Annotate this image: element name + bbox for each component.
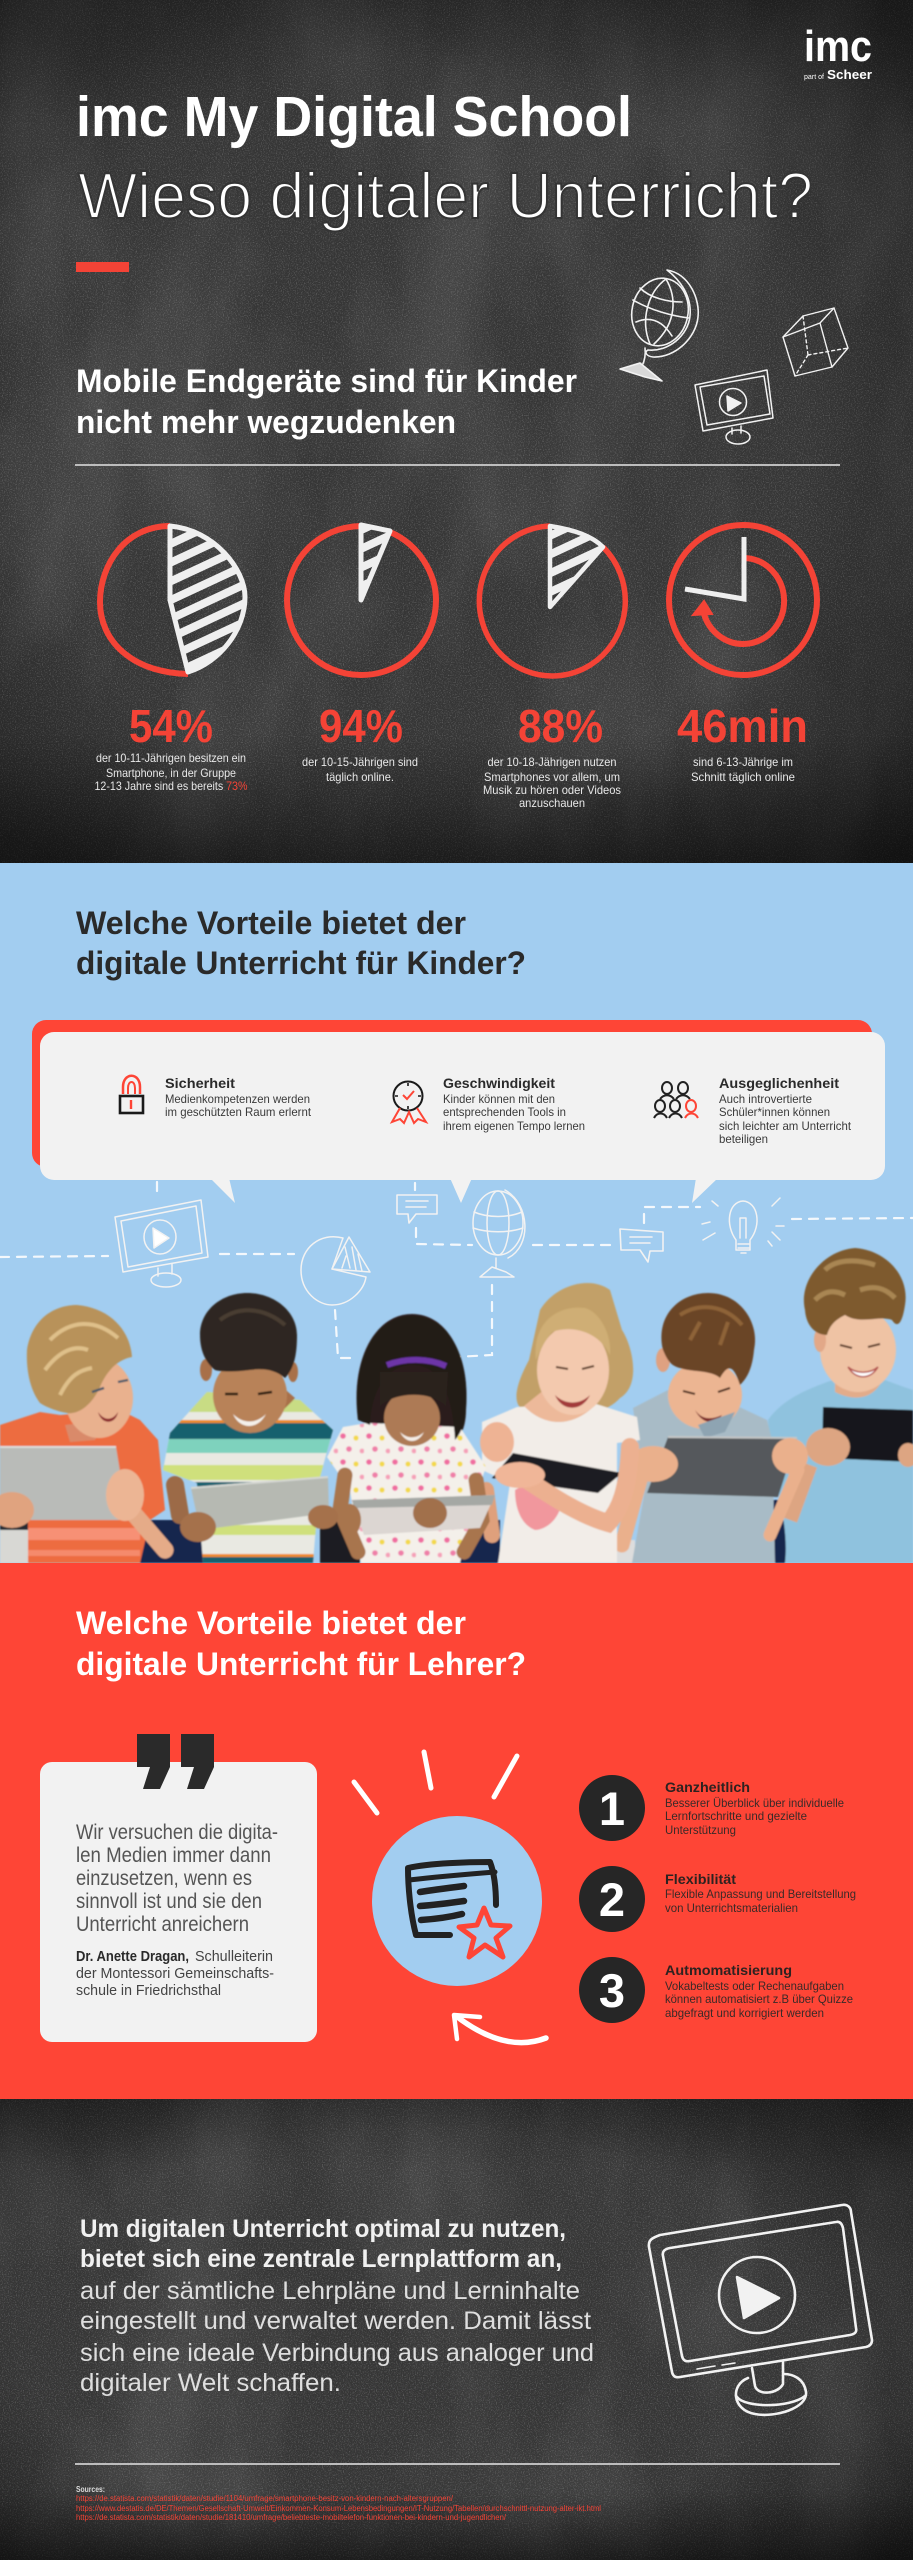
stat descriptions: sind 6-13-Jährige im: [693, 755, 793, 769]
stat descriptions: täglich online.: [326, 770, 394, 784]
list item 1: Ganzheitlich: Lernfortschritte und gezielte: [665, 1809, 807, 1823]
child 2: boy in striped shirt: [160, 1293, 340, 1565]
list item 3: Automatisierung: können automatisiert z.B über Quizze: [665, 1992, 853, 2006]
benefit: Sicherheit: [120, 1075, 312, 1119]
title: imc My Digital School: [76, 85, 632, 149]
stat descriptions: Musik zu hören oder Videos: [483, 783, 621, 797]
list item 2: Flexibilität: Flexibilität: [665, 1871, 736, 1887]
chart: 54 percent pie: [100, 526, 245, 674]
list item 2: Flexibilität: [579, 1866, 856, 1932]
list item 3: Automatisierung: Vokabeltests oder Rechenaufgaben: [665, 1979, 844, 1993]
chart: 46 minutes clock: [669, 525, 817, 675]
list item 3: Automatisierung: [579, 1957, 853, 2023]
icon: quotation marks: [137, 1734, 214, 1789]
stat descriptions: [94, 751, 795, 810]
child 4: blonde girl: [480, 1283, 640, 1563]
stat descriptions: 12-13 Jahre sind es bereits 73%: [94, 779, 248, 793]
stat numbers: 46min: [677, 700, 808, 752]
quote card: Wir versuchen die digita-: [76, 1821, 278, 1844]
quote card: schule in Friedrichsthal: [76, 1982, 221, 1999]
benefit: Ausgeglichenheit: sich leichter am Unterricht: [719, 1119, 852, 1133]
icon: chalk cube: [783, 308, 848, 376]
closing statement text: Um digitalen Unterricht optimal zu nutzen,: [80, 2215, 566, 2243]
stat numbers: 54%: [129, 700, 213, 752]
list item 1: Ganzheitlich: [579, 1775, 844, 1841]
stat descriptions: der 10-15-Jährigen sind: [302, 755, 418, 769]
list item 1: Ganzheitlich: Unterstützung: [665, 1823, 736, 1837]
closing statement text: digitaler Welt schaffen.: [80, 2369, 341, 2397]
logo: imc part of Scheer: imc: [804, 22, 872, 71]
benefit: Geschwindigkeit: [392, 1075, 585, 1133]
chart: 94 percent pie: [287, 525, 436, 675]
stat numbers: 94%: [319, 700, 403, 752]
icon: white globe: [473, 1190, 525, 1277]
icon: white pie chart: [301, 1237, 370, 1305]
logo: imc part of Scheer: part of: [804, 74, 824, 81]
section: chalkboard intro: [0, 0, 913, 863]
heading: benefits for children: [76, 905, 526, 981]
heading: mobile devices: Mobile Endgeräte sind für Kinder: [76, 363, 577, 399]
closing statement text: [80, 2215, 594, 2397]
red accent bar: [76, 262, 129, 272]
quote card: sinnvoll ist und sie den: [76, 1890, 262, 1913]
sources: https://de.statista.com/statistik/daten/studie/1104/umfrage/smartphone-besitz-von-kindern-nach-altersgruppen/: [76, 2494, 454, 2503]
benefit: Sicherheit: im geschützten Raum erlernt: [165, 1105, 312, 1119]
list item 1: Ganzheitlich: Besserer Überblick über individuelle: [665, 1796, 844, 1810]
sources: https://de.statista.com/statistik/daten/studie/181410/umfrage/beliebteste-mobiltelefon-funktionen-bei-kindern-und-jugendlichen/: [76, 2513, 507, 2522]
child 1: blond boy in orange polo: [0, 1305, 165, 1563]
benefit: Ausgeglichenheit: beteiligen: [719, 1132, 768, 1146]
quote card: Schulleiterin: [195, 1948, 273, 1965]
icon: white speech bubble right: [620, 1229, 663, 1262]
stat descriptions: der 10-11-Jährigen besitzen ein: [96, 751, 246, 765]
icon: chalk globe: [620, 270, 698, 381]
benefit: Ausgeglichenheit: Ausgeglichenheit: [719, 1075, 839, 1091]
icon: white light bulb: [702, 1198, 784, 1253]
heading: benefits for children: digitale Unterricht für Kinder?: [76, 945, 526, 981]
icon: certificate with star and sparks: [354, 1752, 542, 1986]
benefit: Ausgeglichenheit: Schüler*innen können: [719, 1105, 830, 1119]
icon: white speech bubble left: [397, 1195, 437, 1223]
chart: 88 percent pie: [479, 526, 625, 676]
list item 2: Flexibilität: Flexible Anpassung und Bereitstellung: [665, 1887, 856, 1901]
quote card: Dr. Anette Dragan,: [76, 1948, 189, 1965]
closing statement text: sich eine ideale Verbindung aus analoger und: [80, 2339, 594, 2367]
icon: chalk video monitor: [695, 370, 773, 444]
stat descriptions: der 10-18-Jährigen nutzen: [488, 755, 616, 769]
sources: [76, 2485, 601, 2522]
speech panel: children benefits: [32, 1020, 885, 1203]
icon: white monitor: [115, 1200, 208, 1287]
list item 1: Ganzheitlich: Ganzheitlich: [665, 1779, 750, 1795]
logo: imc part of Scheer: Scheer: [827, 67, 872, 82]
benefit: Ausgeglichenheit: Auch introvertierte: [719, 1092, 812, 1106]
stat descriptions: Schnitt täglich online: [691, 770, 795, 784]
photo: children with tablets: [0, 1248, 913, 1565]
benefit: Geschwindigkeit: ihrem eigenen Tempo lernen: [443, 1119, 585, 1133]
quote card: len Medien immer dann: [76, 1844, 271, 1867]
list item 1: Ganzheitlich: 1: [599, 1782, 625, 1835]
closing statement text: bietet sich eine zentrale Lernplattform an,: [80, 2245, 562, 2273]
title: [76, 85, 813, 232]
heading: benefits for teachers: Welche Vorteile bietet der: [76, 1605, 466, 1641]
benefit: Ausgeglichenheit: [654, 1075, 852, 1146]
child 3: girl with polka dots: [320, 1314, 495, 1565]
arrow: curved white: [454, 2015, 546, 2043]
photo background bench: [0, 1500, 790, 1563]
heading: mobile devices: nicht mehr wegzudenken: [76, 404, 456, 440]
heading: benefits for teachers: [76, 1605, 526, 1682]
closing statement text: auf der sämtliche Lehrpläne und Lerninhalte: [80, 2277, 580, 2305]
stat numbers: 88%: [518, 700, 603, 752]
quote card: [40, 1734, 317, 2042]
list item 3: Automatisierung: 3: [599, 1964, 625, 2017]
stat descriptions: anzuschauen: [519, 796, 585, 810]
section: red teachers panel: [0, 1563, 913, 2099]
divider top: [75, 464, 840, 466]
heading: mobile devices: [76, 363, 577, 440]
list item 2: Flexibilität: 2: [599, 1873, 625, 1926]
quote card: Unterricht anreichern: [76, 1913, 249, 1936]
child 6: curly hair boy: [768, 1248, 913, 1563]
stat numbers: [129, 700, 808, 752]
title: Wieso digitaler Unterricht?: [78, 159, 813, 232]
quote card: einzusetzen, wenn es: [76, 1867, 252, 1890]
stat descriptions: Smartphones vor allem, um: [484, 770, 620, 784]
benefit: Geschwindigkeit: entsprechenden Tools in: [443, 1105, 566, 1119]
section: chalkboard closing: [0, 2099, 913, 2560]
divider bottom: [75, 2463, 840, 2465]
heading: benefits for teachers: digitale Unterricht für Lehrer?: [76, 1646, 526, 1682]
list item 3: Automatisierung: Autmomatisierung: [665, 1962, 792, 1978]
heading: benefits for children: Welche Vorteile bietet der: [76, 905, 466, 941]
section: blue children panel: [0, 863, 913, 1563]
quote card: der Montessori Gemeinschafts-: [76, 1965, 274, 1982]
benefit: Geschwindigkeit: Kinder können mit den: [443, 1092, 555, 1106]
child 5: brown hair boy: [622, 1293, 808, 1563]
list item 3: Automatisierung: abgefragt und korrigiert werden: [665, 2006, 824, 2020]
sources: Sources:: [76, 2485, 105, 2494]
icon: large chalk video monitor: [649, 2205, 872, 2415]
benefit: Sicherheit: Sicherheit: [165, 1075, 235, 1091]
benefit: Sicherheit: Medienkompetenzen werden: [165, 1092, 310, 1106]
illustration: dashed connectors: [0, 1182, 913, 1358]
stat descriptions: Smartphone, in der Gruppe: [106, 766, 236, 780]
closing statement text: eingestellt und verwaltet werden. Damit lässt: [80, 2307, 591, 2335]
sources: https://www.destatis.de/DE/Themen/Gesellschaft-Umwelt/Einkommen-Konsum-Lebensbedingungen/IT-Nutzung/Tabellen/durchschnittl-nutzung-alter-ikt.html: [76, 2504, 601, 2513]
benefit: Geschwindigkeit: Geschwindigkeit: [443, 1075, 555, 1091]
list item 2: Flexibilität: von Unterrichtsmaterialien: [665, 1901, 798, 1915]
